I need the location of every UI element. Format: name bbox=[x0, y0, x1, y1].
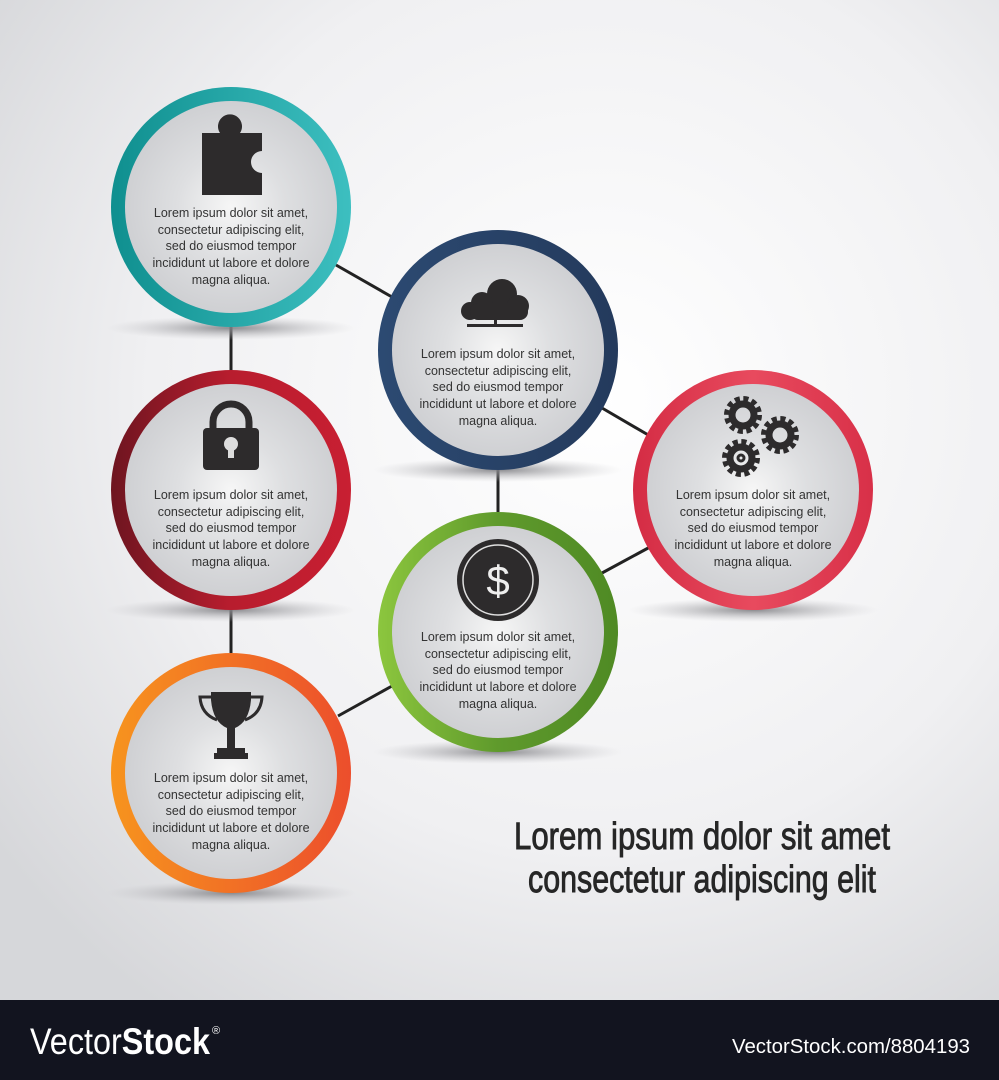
circle: pink gears bbox=[633, 370, 873, 610]
circle: crimson lock: Lorem ipsum dolor sit amet, bbox=[154, 488, 308, 502]
shadows bbox=[106, 316, 878, 905]
icon: dollar coin bbox=[457, 539, 539, 621]
headline text: consectetur adipiscing elit bbox=[528, 859, 876, 901]
circle: pink gears: sed do eiusmod tempor bbox=[688, 521, 818, 535]
circle: orange trophy: sed do eiusmod tempor bbox=[166, 804, 296, 818]
circle: green dollar: incididunt ut labore et dolore bbox=[419, 680, 577, 694]
circle: crimson lock bbox=[111, 370, 351, 610]
circle: teal puzzle: consectetur adipiscing elit, bbox=[158, 223, 304, 237]
circle: teal puzzle: magna aliqua. bbox=[192, 273, 270, 287]
circle: crimson lock: sed do eiusmod tempor bbox=[166, 521, 296, 535]
circle: blue cloud bbox=[378, 230, 618, 470]
circle: crimson lock: consectetur adipiscing elit, bbox=[158, 505, 304, 519]
circle: teal puzzle bbox=[111, 87, 351, 327]
circle: blue cloud: incididunt ut labore et dolore bbox=[419, 397, 577, 411]
icon: trophy bbox=[200, 692, 262, 759]
circle: teal puzzle: sed do eiusmod tempor bbox=[166, 239, 296, 253]
circle: crimson lock: incididunt ut labore et dolore bbox=[152, 538, 310, 552]
circle: orange trophy: magna aliqua. bbox=[192, 838, 270, 852]
headline text: Lorem ipsum dolor sit amet bbox=[514, 816, 890, 858]
circle: blue cloud: magna aliqua. bbox=[459, 414, 537, 428]
circle: green dollar: sed do eiusmod tempor bbox=[433, 663, 563, 677]
circle: blue cloud: sed do eiusmod tempor bbox=[433, 380, 563, 394]
icon: cloud bbox=[461, 279, 529, 327]
icon: puzzle bbox=[202, 114, 262, 195]
circle: pink gears: magna aliqua. bbox=[714, 555, 792, 569]
circle: green dollar: Lorem ipsum dolor sit amet, bbox=[421, 630, 575, 644]
circle: orange trophy: consectetur adipiscing elit, bbox=[158, 788, 304, 802]
circle: orange trophy: Lorem ipsum dolor sit amet, bbox=[154, 771, 308, 785]
circle: blue cloud: Lorem ipsum dolor sit amet, bbox=[421, 347, 575, 361]
circle: pink gears: Lorem ipsum dolor sit amet, bbox=[676, 488, 830, 502]
footer bar bbox=[0, 1000, 999, 1080]
icon: dollar coin: $ bbox=[486, 557, 510, 604]
circle: green dollar bbox=[378, 512, 618, 752]
circle: orange trophy bbox=[111, 653, 351, 893]
circle: blue cloud: consectetur adipiscing elit, bbox=[425, 364, 571, 378]
connector lines bbox=[231, 265, 650, 716]
circle: pink gears: incididunt ut labore et dolore bbox=[674, 538, 832, 552]
circle: pink gears: consectetur adipiscing elit, bbox=[680, 505, 826, 519]
circle: green dollar: magna aliqua. bbox=[459, 697, 537, 711]
circle: green dollar: consectetur adipiscing elit, bbox=[425, 647, 571, 661]
footer bar: ® bbox=[212, 1025, 220, 1037]
circle: teal puzzle: Lorem ipsum dolor sit amet, bbox=[154, 206, 308, 220]
footer bar: VectorStock bbox=[30, 1021, 210, 1062]
headline text bbox=[514, 816, 890, 901]
icon: gears bbox=[725, 399, 796, 474]
footer bar: VectorStock.com/8804193 bbox=[732, 1036, 970, 1058]
circle: orange trophy: incididunt ut labore et dolore bbox=[152, 821, 310, 835]
icon: lock bbox=[203, 404, 259, 470]
circle: crimson lock: magna aliqua. bbox=[192, 555, 270, 569]
circle: teal puzzle: incididunt ut labore et dolore bbox=[152, 256, 310, 270]
